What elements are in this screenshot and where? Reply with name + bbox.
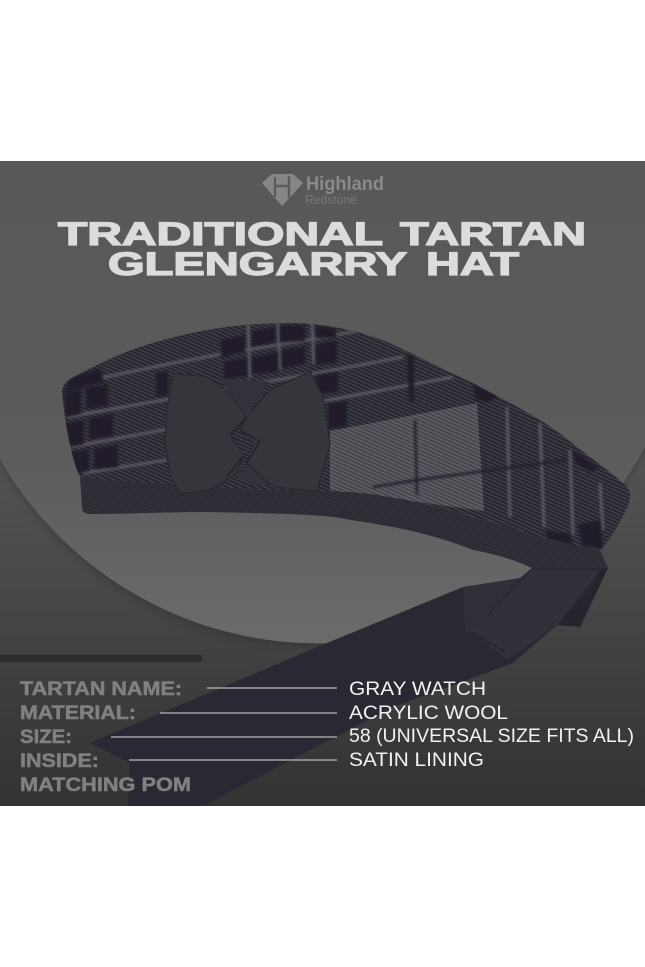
plaid dark overpass lines — [373, 420, 567, 495]
leader lines — [111, 688, 337, 760]
spec list: tartan details — [20, 678, 634, 796]
logo: Highland Redstone: Highland — [306, 174, 384, 195]
spec values: GRAY WATCH — [349, 678, 486, 700]
title — [58, 216, 586, 282]
title: HAT — [426, 246, 520, 282]
spec labels — [20, 679, 191, 796]
spec labels: MATCHING POM — [20, 775, 191, 796]
panel: dark product background — [0, 161, 645, 806]
plaid light stripes — [67, 322, 603, 535]
title: TRADITIONAL — [58, 216, 383, 252]
hat bow — [165, 372, 330, 494]
hat crown with plaid — [62, 323, 630, 550]
spec labels: TARTAN NAME: — [20, 679, 182, 700]
logo: Highland Redstone — [262, 174, 384, 207]
spec labels: INSIDE: — [20, 751, 99, 772]
hat: tartan glengarry — [50, 315, 640, 806]
hat ribbon tail — [90, 568, 608, 806]
title: GLENGARRY — [108, 246, 407, 282]
hat band — [80, 477, 608, 568]
spec values: 58 (UNIVERSAL SIZE FITS ALL) — [349, 725, 634, 747]
spec values: ACRYLIC WOOL — [349, 702, 508, 724]
plaid dark blocks — [64, 325, 603, 549]
spec labels: MATERIAL: — [20, 703, 136, 724]
spec labels: SIZE: — [20, 727, 72, 748]
logo: Highland Redstone: Redstone — [305, 193, 357, 207]
spec values: SATIN LINING — [349, 749, 484, 771]
spec values — [349, 678, 634, 771]
title: TARTAN — [400, 216, 586, 252]
